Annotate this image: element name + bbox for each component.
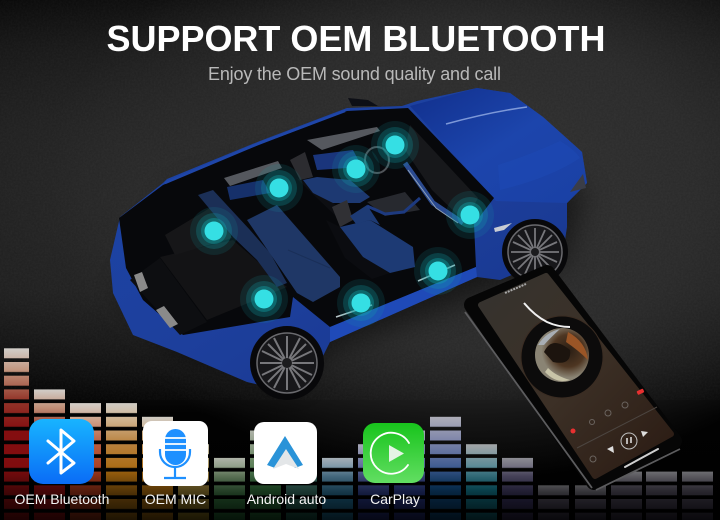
front headrest (332, 200, 353, 227)
console (367, 192, 420, 216)
rear panel (130, 258, 207, 335)
icon: carplay (363, 423, 424, 483)
rear wheel (250, 326, 324, 400)
sill light strips (336, 265, 455, 317)
window trim (224, 127, 380, 186)
dash light strip (408, 170, 458, 223)
windshield interior (405, 125, 478, 222)
background texture (0, 0, 720, 400)
mirror (348, 98, 378, 106)
equalizer bars (0, 348, 720, 520)
car body (110, 88, 587, 392)
headlight (570, 174, 586, 192)
driver seat side (296, 178, 345, 220)
phone side edge (465, 312, 680, 490)
label: OEM MIC: OEM MIC (145, 491, 206, 507)
driver headrest (290, 152, 313, 180)
vinyl disc (521, 316, 603, 398)
front seat side (326, 220, 390, 279)
label: CarPlay: CarPlay (370, 491, 420, 507)
icon: android auto (254, 422, 317, 484)
front door panel (313, 150, 362, 170)
rear bench seam (288, 250, 330, 268)
album art (535, 328, 589, 382)
phone frame (472, 273, 674, 482)
roof rail highlight (165, 111, 345, 183)
title: SUPPORT OEM BLUETOOTH (106, 18, 606, 59)
dash blue strip (405, 163, 463, 223)
front wheel (502, 219, 568, 285)
icon: bluetooth (29, 419, 94, 484)
front seat back (350, 205, 380, 225)
third row seat (198, 190, 287, 287)
notch (492, 273, 530, 293)
door handle (494, 223, 512, 232)
label: Android auto: Android auto (247, 491, 326, 507)
phone (465, 273, 680, 490)
trunk side panel (165, 205, 232, 255)
status and title bits (505, 284, 526, 293)
rear door panel (227, 180, 270, 200)
front seat cushion (340, 220, 415, 273)
subtitle: Enjoy the OEM sound quality and call (208, 64, 501, 84)
car (110, 88, 587, 400)
hood crease highlight (446, 107, 527, 124)
rear bench seat (247, 205, 340, 302)
car shadow (120, 115, 585, 385)
player controls (570, 388, 658, 467)
rear lights (134, 272, 178, 328)
phone screen (481, 276, 671, 476)
hood lower panel (498, 141, 580, 190)
driver seat cushion (303, 177, 370, 203)
speaker glow markers (190, 121, 494, 327)
interior opening (119, 108, 494, 335)
console shift trim (367, 198, 420, 214)
steering wheel (365, 147, 389, 173)
hood (410, 88, 587, 203)
tonearm (524, 303, 570, 327)
sill (330, 267, 477, 342)
label: OEM Bluetooth: OEM Bluetooth (15, 491, 109, 507)
trunk floor (160, 240, 287, 320)
icon: microphone (143, 421, 208, 486)
